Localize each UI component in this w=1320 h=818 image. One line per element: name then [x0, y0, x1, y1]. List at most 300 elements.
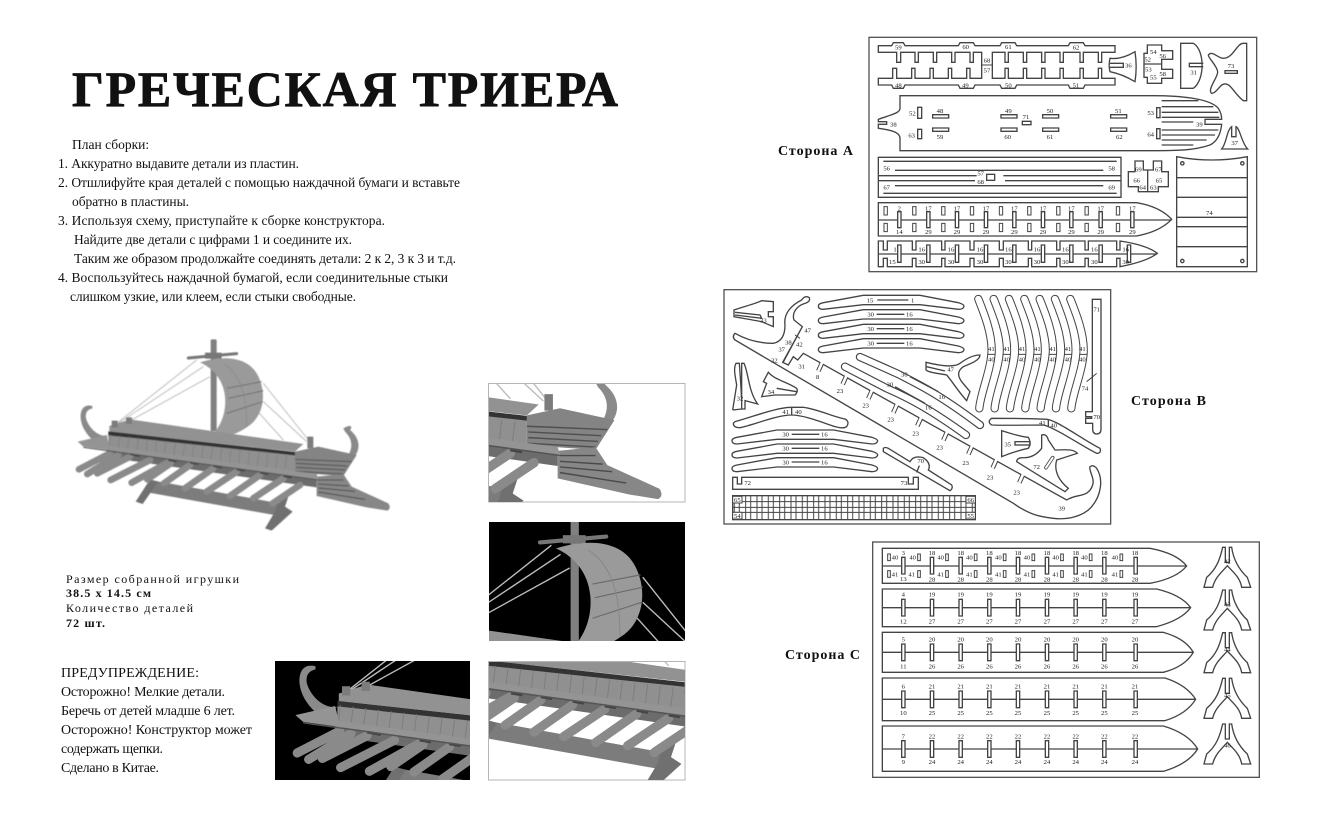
part: comb frame: 57	[984, 68, 991, 75]
part: hull layer 3/13	[882, 548, 1187, 584]
part: deck: 48	[937, 108, 944, 115]
part: hull strip 2-29: 17	[1129, 205, 1136, 212]
part 44: 44	[1224, 646, 1231, 653]
parts: seven ribs 41/40: 40	[1065, 356, 1072, 363]
parts: seven ribs 41/40: 40	[1034, 356, 1041, 363]
assembly instructions: 3. Используя схему, приступайте к сборке конструктора.	[58, 213, 385, 228]
part 73: 73	[1228, 63, 1235, 70]
part: hull layer 6/10: 25	[1072, 710, 1080, 717]
part 72: 72	[1033, 464, 1040, 471]
part: hull layer 6/10: 25	[1044, 710, 1051, 717]
assembly instructions: Найдите две детали с цифрами 1 и соедините их.	[74, 232, 352, 247]
assembly instructions: 4. Воспользуйтесь наждачной бумагой, если соединительные стыки	[58, 270, 448, 285]
part: planked strip: 56	[883, 166, 891, 173]
part 74: plate	[1177, 157, 1247, 267]
part 42: 42	[1224, 559, 1231, 566]
part: comb frame	[878, 43, 1115, 89]
part: hull strip 1-30: 30	[977, 259, 984, 266]
part: hull layer 3/13: 18	[1015, 550, 1022, 557]
part: comb frame: 59	[895, 44, 902, 51]
parts: upper strips 15/1, 30/16: 30	[867, 341, 875, 348]
parts: lower strips 30/16: 30	[782, 459, 790, 466]
part: deck: 50	[1047, 108, 1054, 115]
part: hull strip 2-29: 17	[1040, 205, 1047, 212]
part: hull strip 1-30: 16	[918, 247, 926, 254]
part: bar 72-73	[733, 477, 918, 489]
warning: содержать щепки.	[61, 742, 163, 757]
parts: seven ribs 41/40	[978, 299, 1087, 408]
part: hull layer 3/13: 28	[1101, 577, 1108, 584]
part: hull layer 7/9: 22	[1101, 733, 1108, 740]
part: hull layer 4/12: 19	[929, 592, 936, 599]
part: hull layer 3/13: 18	[957, 550, 965, 557]
parts: seven ribs 41/40: 40	[988, 356, 995, 363]
part: small bracket 52-58	[1144, 45, 1173, 83]
part 33: 33	[760, 317, 767, 324]
part: keel: 38	[785, 340, 792, 347]
part: planked strip: 67	[883, 185, 891, 192]
part: hull layer 5/11: 20	[1132, 636, 1139, 643]
product size and parts count: Размер собранной игрушки	[66, 572, 240, 586]
part 37: 37	[1231, 140, 1239, 147]
part: deck: 38	[890, 122, 897, 129]
parts: upper strips 15/1, 30/16: 1	[911, 297, 914, 304]
part: deck: 53	[1147, 110, 1155, 117]
panel: side B parts sheet	[724, 290, 1111, 524]
part: comb frame: 49	[962, 82, 969, 89]
part: hull layer 7/9: 9	[902, 759, 906, 766]
parts: lower strips 30/16: 16	[821, 446, 828, 453]
part: hull strip 1-30: 16	[1034, 247, 1041, 254]
part: hull layer 7/9: 22	[986, 733, 993, 740]
part 42	[1204, 547, 1251, 587]
part: hull strip 1-30: 16	[1062, 247, 1069, 254]
part: hull layer 3/13: 18	[986, 550, 993, 557]
assembly instructions: 1. Аккуратно выдавите детали из пластин.	[58, 156, 299, 171]
part: small bracket 52-58: 53	[1145, 66, 1152, 73]
part: hull strip 1-30: 30	[918, 259, 926, 266]
part: hull layer 3/13: 3	[902, 550, 906, 557]
part: small bracket 52-58: 55	[1150, 74, 1157, 81]
part: hull layer 5/11: 26	[929, 663, 936, 670]
part: hull layer 4/12: 27	[1072, 618, 1080, 625]
part: hull layer 3/13: 41	[892, 571, 898, 578]
part: hull layer 4/12: 19	[1101, 592, 1108, 599]
label: side A: Сторона А	[778, 144, 854, 159]
part 31	[1181, 43, 1203, 88]
part: hull layer 5/11: 26	[1101, 663, 1108, 670]
part: comb frame: 50	[1005, 82, 1012, 89]
part: grating: 54	[734, 513, 741, 520]
warning: Осторожно! Мелкие детали.	[61, 685, 225, 700]
part: hull layer 4/12: 12	[900, 618, 907, 625]
part: hull layer 3/13: 41	[1112, 571, 1118, 578]
part: hull layer 4/12: 27	[957, 618, 965, 625]
part: hull strip 1-30: 15	[889, 259, 896, 266]
part: hull strip 2-29: 17	[1068, 205, 1075, 212]
part: hull layer 3/13: 18	[1132, 550, 1139, 557]
panel: side C parts sheet	[873, 542, 1259, 777]
part: deck: 59	[937, 134, 944, 141]
part: deck: 61	[1047, 134, 1053, 141]
part: hull layer 5/11: 20	[1044, 636, 1051, 643]
parts: upper strips 15/1, 30/16	[818, 295, 964, 353]
panel: side A parts sheet	[869, 37, 1257, 272]
part: hull layer 3/13: 41	[908, 571, 915, 578]
parts: upper strips 15/1, 30/16: 30	[867, 326, 875, 333]
part: small bracket 63-69: 65	[1156, 177, 1163, 184]
parts: diagonal strips 30/16: 30	[901, 372, 908, 379]
parts: seven ribs 41/40: 40	[1003, 356, 1011, 363]
part: hull strip 1-30: 30	[1091, 259, 1098, 266]
part 47: 47	[947, 366, 955, 373]
part: hull layer 3/13: 40	[966, 555, 973, 562]
assembly instructions: План сборки:	[72, 137, 149, 152]
part: hull layer 7/9: 24	[986, 759, 993, 766]
part: grating: 55	[967, 513, 975, 520]
part: hull layer 4/12: 19	[1132, 592, 1139, 599]
assembly instructions: 2. Отшлифуйте края деталей с помощью наждачной бумаги и вставьте	[58, 175, 460, 190]
part: hull layer 4/12: 19	[1015, 592, 1022, 599]
part: hull layer 4/12: 27	[1015, 618, 1022, 625]
part: hull strip 2-29: 29	[1068, 229, 1075, 236]
warning	[61, 666, 252, 776]
part: planked strip: 68	[977, 179, 985, 186]
part: deck	[878, 96, 1222, 151]
part: hull strip 1-30: 30	[1122, 259, 1130, 266]
part: hull layer 6/10: 25	[929, 710, 936, 717]
assembly instructions: слишком узкие, или клеем, если стыки свободные.	[70, 289, 356, 304]
parts: seven ribs 41/40: 41	[1003, 346, 1010, 353]
part: keel: 23	[936, 445, 944, 452]
part: hull layer 5/11: 26	[1072, 663, 1080, 670]
part: hull layer 4/12: 19	[986, 592, 993, 599]
part: hull strip 2-29: 17	[925, 205, 932, 212]
part: small bracket 52-58: 56	[1159, 53, 1167, 60]
part: hull layer 4/12: 27	[986, 618, 993, 625]
part: small bracket 52-58: 52	[1144, 56, 1151, 63]
part 46: 46	[1224, 742, 1231, 749]
part 71/74/70: tall bar: 71	[1093, 306, 1100, 313]
part: hull layer 5/11: 20	[957, 636, 965, 643]
part: hull strip 1-30: 16	[1091, 247, 1098, 254]
part: small bracket 63-69: 67	[1155, 167, 1162, 174]
part: strip 41-40: 40	[795, 409, 802, 416]
part: hull layer 4/12: 27	[1101, 618, 1108, 625]
parts: seven ribs 41/40: 41	[1034, 346, 1041, 353]
part: planked strip: 58	[1108, 166, 1116, 173]
part: hull layer 5/11: 26	[986, 663, 993, 670]
part: hull layer 6/10: 25	[957, 710, 965, 717]
part 36	[1109, 52, 1136, 82]
part: hull layer 3/13: 13	[900, 576, 907, 583]
part: hull layer 6/10: 25	[986, 710, 993, 717]
part: keel: 23	[1013, 490, 1021, 497]
part: hull layer 6/10: 25	[1132, 710, 1139, 717]
assembly instructions: Таким же образом продолжайте соединять детали: 2 к 2, 3 к 3 и т.д.	[74, 251, 456, 266]
parts: upper strips 15/1, 30/16: 16	[906, 326, 913, 333]
part 71/74/70: tall bar: 74	[1082, 386, 1089, 393]
photo crop: stern	[275, 661, 470, 780]
part: comb frame: 48	[895, 82, 902, 89]
part: hull layer 3/13: 41	[995, 571, 1002, 578]
part: hull layer 5/11: 26	[1015, 663, 1022, 670]
part 43: 43	[1224, 601, 1231, 608]
part: hull strip 2-29: 14	[896, 229, 903, 236]
part: hull layer 7/9: 22	[929, 733, 935, 740]
part: hull strip 2-29: 29	[1011, 229, 1018, 236]
part: hull layer 3/13: 41	[1081, 571, 1088, 578]
part: hull layer 7/9: 22	[1044, 733, 1050, 740]
part 47	[926, 355, 980, 401]
part: hull layer 3/13: 18	[1072, 550, 1080, 557]
part: hull layer 3/13: 28	[1044, 577, 1051, 584]
product size and parts count: 38.5 x 14.5 см	[66, 586, 151, 600]
part: hull strip 2-29: 29	[954, 229, 961, 236]
parts: lower strips 30/16: 30	[782, 432, 790, 439]
part: hull layer 3/13: 28	[1072, 577, 1080, 584]
part: hull layer 7/9: 24	[1072, 759, 1080, 766]
photo: assembled trireme	[78, 339, 390, 531]
part: small bracket 52-58: 54	[1150, 49, 1157, 56]
part: hull layer 5/11: 5	[902, 636, 906, 643]
part 36: 36	[1125, 62, 1132, 69]
part: hull layer 7/9: 24	[929, 759, 936, 766]
parts: diagonal strips 30/16: 30	[887, 382, 894, 389]
part: hull layer 7/9: 22	[1132, 733, 1138, 740]
part: hull layer 5/11	[882, 632, 1193, 672]
part: hull layer 4/12: 27	[1132, 618, 1139, 625]
part: small bracket 63-69: 63	[1150, 185, 1157, 192]
part: hull strip 1-30: 30	[1034, 259, 1041, 266]
part: keel: 47	[804, 327, 812, 334]
part 70: 70	[917, 458, 925, 465]
warning: ПРЕДУПРЕЖДЕНИЕ:	[61, 666, 199, 681]
part: hull strip 1-30: 16	[1122, 247, 1130, 254]
part: hull layer 6/10	[882, 678, 1196, 721]
part: hull layer 3/13: 40	[1052, 555, 1060, 562]
part: keel: 23	[887, 417, 895, 424]
part: hull layer 4/12: 19	[1044, 592, 1051, 599]
part: hull layer 4/12	[882, 589, 1191, 627]
part 33	[734, 301, 773, 327]
part: strip 41-40 lower	[989, 418, 1100, 453]
part: grating: 66	[967, 497, 975, 504]
part: bar 72-73: 72	[744, 480, 751, 487]
part: deck: 62	[1116, 134, 1123, 141]
part: keel	[733, 297, 1101, 519]
part 46	[1204, 724, 1251, 764]
part: small bracket 63-69: 66	[1133, 177, 1141, 184]
part: hull layer 5/11: 26	[1044, 663, 1051, 670]
part: hull layer 3/13: 41	[1024, 571, 1030, 578]
part: small bracket 63-69: 64	[1139, 185, 1147, 192]
parts: lower strips 30/16: 16	[821, 432, 828, 439]
part: strip 41-40 lower: 40	[1050, 422, 1058, 429]
assembly instructions: обратно в пластины.	[72, 194, 189, 209]
part: hull layer 5/11: 20	[1015, 636, 1022, 643]
photo crop: sail	[489, 522, 685, 641]
part: hull layer 4/12: 19	[957, 592, 965, 599]
part: hull layer 3/13: 40	[1024, 555, 1031, 562]
part: hull layer 5/11: 20	[929, 636, 936, 643]
part: hull strip 2-29: 29	[1097, 229, 1105, 236]
part: small bracket 63-69	[1128, 161, 1168, 192]
part 74: plate: 74	[1206, 210, 1213, 217]
parts: upper strips 15/1, 30/16: 15	[867, 297, 874, 304]
product size and parts count: Количество деталей	[66, 601, 194, 615]
part: deck: 60	[1004, 134, 1012, 141]
product size and parts count	[66, 572, 240, 630]
part: deck: 64	[1147, 132, 1155, 139]
part: hull layer 6/10: 6	[902, 683, 906, 690]
parts: seven ribs 41/40: 41	[1049, 346, 1056, 353]
part: hull layer 4/12: 27	[1044, 618, 1051, 625]
part: hull strip 2-29: 29	[983, 229, 990, 236]
part: planked strip: 57	[977, 171, 985, 178]
warning: Беречь от детей младше 6 лет.	[61, 704, 235, 719]
parts: seven ribs 41/40: 41	[988, 346, 995, 353]
parts: seven ribs 41/40: 40	[1049, 356, 1057, 363]
part 32: 32	[737, 396, 743, 403]
part: hull layer 6/10: 21	[1132, 683, 1138, 690]
part 34	[762, 372, 797, 397]
part: strip 41-40	[733, 407, 848, 428]
part: hull strip 2-29: 29	[925, 229, 932, 236]
part: hull layer 5/11: 20	[986, 636, 993, 643]
part: hull strip 2-29: 17	[1011, 205, 1018, 212]
label: side C: Сторона С	[785, 648, 860, 663]
part: hull layer 3/13: 40	[1081, 555, 1088, 562]
part: keel: 23	[837, 388, 844, 395]
part: hull strip 1-30	[878, 241, 1157, 267]
part 72	[1017, 435, 1077, 492]
part: hull layer 6/10: 21	[1101, 683, 1108, 690]
part 45: 45	[1224, 692, 1231, 699]
part: hull layer 5/11: 26	[957, 663, 965, 670]
part 71/74/70: tall bar	[1082, 299, 1101, 434]
part: hull layer 5/11: 11	[900, 663, 907, 670]
parts: lower strips 30/16: 16	[821, 459, 828, 466]
part: keel: 32	[771, 358, 778, 365]
part: hull layer 7/9	[882, 726, 1198, 771]
part: hull layer 7/9: 24	[1132, 759, 1139, 766]
part: small bracket 63-69: 69	[1135, 167, 1142, 174]
part: hull layer 6/10: 21	[1072, 683, 1079, 690]
part: hull layer 6/10: 21	[1044, 683, 1050, 690]
part: hull strip 2-29: 17	[1097, 205, 1105, 212]
part 35: 35	[1004, 441, 1012, 448]
parts: diagonal strips 30/16	[845, 357, 980, 435]
part: hull layer 3/13: 18	[1101, 550, 1108, 557]
part: hull layer 3/13: 28	[1015, 577, 1022, 584]
part: bar 72-73: 73	[901, 480, 908, 487]
part 31: 31	[1190, 70, 1197, 77]
part: hull layer 6/10: 21	[986, 683, 993, 690]
warning: Сделано в Китае.	[61, 761, 159, 776]
part: hull layer 7/9: 22	[1015, 733, 1021, 740]
part: planked strip	[878, 157, 1121, 197]
part: grating: 65	[734, 497, 741, 504]
part: keel: 23	[962, 460, 970, 467]
label: side B: Сторона В	[1131, 394, 1206, 409]
part: hull strip 1-30: 1	[893, 247, 897, 254]
part: hull strip 1-30: 30	[948, 259, 955, 266]
part: hull strip 2-29	[878, 203, 1172, 236]
parts: lower strips 30/16: 30	[782, 446, 790, 453]
part: deck: 49	[1005, 108, 1012, 115]
part: comb frame: 62	[1073, 44, 1079, 51]
part: hull layer 3/13: 40	[892, 555, 899, 562]
part: hull strip 1-30: 30	[1005, 259, 1012, 266]
part: deck: 52	[909, 111, 916, 118]
part: hull layer 6/10: 25	[1101, 710, 1108, 717]
part 34: 34	[768, 389, 775, 396]
part: hull layer 4/12: 27	[929, 618, 936, 625]
part: grating	[733, 496, 975, 520]
part: hull layer 3/13: 40	[937, 555, 945, 562]
parts: seven ribs 41/40: 40	[1019, 356, 1026, 363]
part: hull layer 3/13: 18	[929, 550, 936, 557]
part: hull layer 3/13: 28	[957, 577, 965, 584]
part: hull layer 6/10: 21	[929, 683, 935, 690]
photo crop: oars	[488, 661, 686, 780]
part: hull layer 5/11: 20	[1072, 636, 1080, 643]
part: deck: 71	[1023, 114, 1029, 121]
warning: Осторожно! Конструктор может	[61, 723, 252, 738]
part: hull layer 3/13: 41	[966, 571, 973, 578]
part: comb frame: 68	[984, 57, 991, 64]
part: keel: 23	[912, 431, 920, 438]
part 32	[733, 363, 758, 410]
part: comb frame: 61	[1005, 44, 1012, 51]
part: hull layer 5/11: 26	[1132, 663, 1139, 670]
part 43	[1204, 590, 1251, 630]
part: small bracket 52-58: 58	[1159, 71, 1167, 78]
parts: seven ribs 41/40: 41	[1079, 346, 1086, 353]
part: deck: 51	[1115, 108, 1122, 115]
part: hull strip 2-29: 2	[898, 205, 901, 212]
part: strip 41-40: 41	[782, 409, 789, 416]
part: hull layer 7/9: 24	[957, 759, 965, 766]
part: planked strip: 69	[1108, 185, 1116, 192]
part 35	[1002, 431, 1030, 457]
part: deck: 63	[908, 132, 916, 139]
part 70	[883, 447, 952, 491]
part: comb frame: 51	[1073, 82, 1079, 89]
part: hull layer 7/9: 22	[1072, 733, 1079, 740]
part: hull layer 3/13: 28	[986, 577, 993, 584]
part: hull layer 3/13: 41	[1052, 571, 1059, 578]
parts: seven ribs 41/40: 40	[1079, 356, 1086, 363]
parts: diagonal strips 30/16: 16	[938, 394, 946, 401]
part: keel: 31	[798, 363, 805, 370]
part: hull layer 7/9: 22	[957, 733, 964, 740]
title: ГРЕЧЕСКАЯ ТРИЕРА	[72, 61, 618, 117]
part: hull layer 3/13: 41	[937, 571, 944, 578]
part 45	[1204, 678, 1251, 718]
parts: diagonal strips 30/16: 16	[925, 405, 932, 412]
part: hull layer 3/13: 40	[1112, 555, 1119, 562]
part: hull layer 6/10: 21	[957, 683, 964, 690]
part: keel: 39	[1058, 506, 1066, 513]
part: hull strip 1-30: 16	[1005, 247, 1012, 254]
part: comb frame: 60	[962, 44, 970, 51]
photo crop: bow	[488, 383, 686, 502]
part: hull layer 3/13: 28	[929, 577, 936, 584]
part 73	[1208, 43, 1247, 101]
part: hull layer 3/13: 40	[995, 555, 1002, 562]
